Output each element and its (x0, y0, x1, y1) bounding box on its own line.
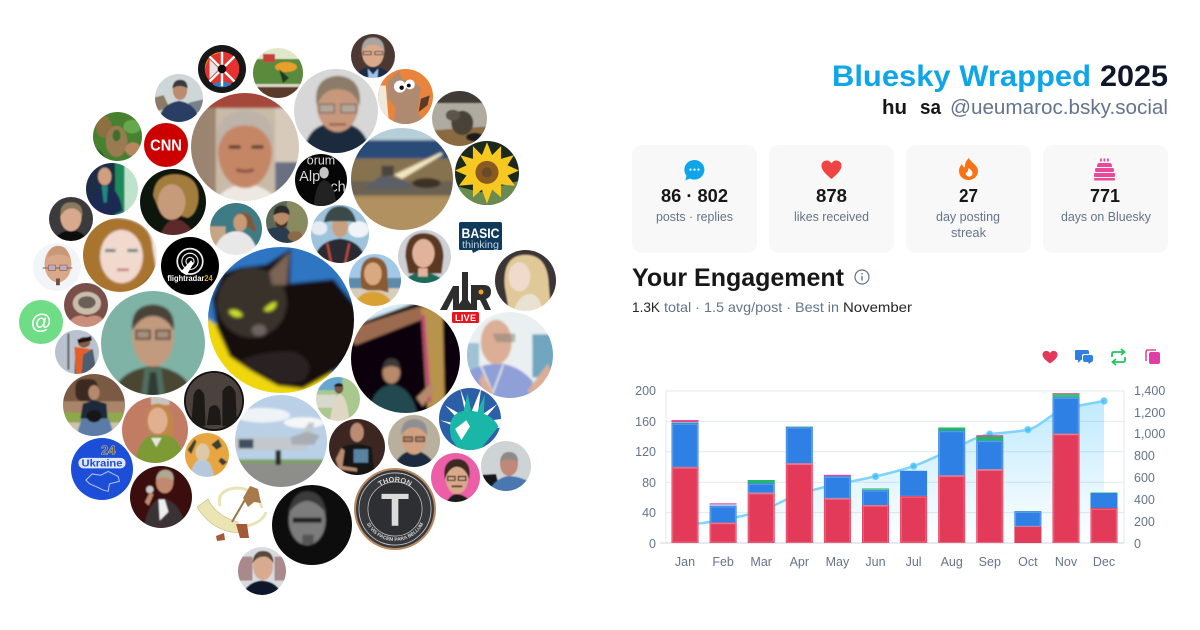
panel: likes received: 878 (816, 186, 847, 206)
panel: likes received (769, 145, 894, 253)
month labels: Nov (1055, 555, 1078, 569)
left axis labels: 0 (649, 537, 656, 551)
bar: Jun (862, 488, 889, 543)
avatar: man under market tent (351, 304, 460, 413)
right axis labels: 1,200 (1134, 406, 1165, 420)
engagement summary: November (843, 299, 912, 315)
logo: BASIC thinking: thinking (462, 240, 499, 251)
avatar: punk X logo (198, 45, 246, 93)
icon: birthday cake (1094, 158, 1115, 180)
right axis labels: 800 (1134, 449, 1155, 463)
bar: Apr (786, 426, 813, 543)
icon: legend likes (1042, 351, 1058, 364)
avatar: man in bookshelf room (238, 547, 286, 595)
month labels: Apr (790, 555, 809, 569)
avatar: woman with teal top (398, 230, 451, 283)
icon: legend replies (1075, 350, 1093, 364)
logo: AIR LIVE: LIVE (455, 313, 476, 323)
avatar: CNN logo (144, 123, 188, 167)
avatar: bald cartoon avatar (33, 243, 81, 291)
icon: horn and hobby horse (197, 486, 266, 541)
avatar: glasses man with grey hair (388, 415, 440, 467)
left axis labels: 40 (642, 506, 656, 520)
panel: day posting streak: day posting (936, 210, 1000, 224)
icon: legend quotes (1146, 350, 1160, 364)
right axis labels: 0 (1134, 537, 1141, 551)
stacked bars (672, 393, 1118, 543)
right axis labels (1134, 384, 1165, 551)
avatar: toucan sign (253, 48, 303, 98)
chart gridlines (660, 391, 1124, 543)
avatar: dark portrait man with book (329, 419, 385, 475)
avatar: woman at the beach (349, 254, 401, 306)
avatar: Forum Alpbach: Alp (299, 169, 320, 185)
icon: info (855, 270, 869, 284)
avatar: Ukraine 24 (71, 438, 133, 500)
left axis labels: 160 (635, 415, 656, 429)
avatar: landscape with rocket launcher (351, 128, 453, 230)
avatar: man with glasses on mint background (101, 291, 205, 395)
avatar: Forum Alpbach (295, 154, 347, 206)
panel: day posting streak (906, 145, 1031, 253)
avatar: man with glasses dark wall (351, 34, 395, 78)
month labels (675, 555, 1115, 569)
avatar: red-haired woman (83, 218, 157, 292)
avatar: older man portrait (191, 93, 299, 201)
avatar: woman in white on sofa (210, 203, 262, 255)
avatar: woman in green cardigan (122, 397, 188, 463)
left axis labels (635, 384, 656, 551)
cumulative line (685, 401, 1104, 525)
logo: BASIC thinking (459, 222, 502, 253)
avatar: man dark background (49, 197, 93, 241)
left axis labels: 120 (635, 445, 656, 459)
avatar: airplane on tarmac (235, 395, 327, 487)
avatar: seated person in greenery (316, 377, 360, 421)
right axis labels: 1,000 (1134, 427, 1165, 441)
panel: days on Bluesky: days on Bluesky (1061, 210, 1152, 224)
avatar: green @ placeholder (19, 300, 63, 344)
avatar: cartoon cat on orange (378, 69, 433, 124)
avatar: bearded man outdoors (266, 201, 308, 243)
panel: day posting streak: streak (951, 226, 987, 240)
panel: posts and replies: posts · replies (656, 210, 733, 224)
avatar: man on brick steps (63, 374, 125, 436)
title: Bluesky Wrapped (832, 60, 1091, 93)
avatar: Thoron coin: THORON (378, 476, 412, 486)
avatar: Ukraine 24: 24 (101, 443, 116, 458)
month labels: Aug (941, 555, 963, 569)
panel: days on Bluesky (1043, 145, 1168, 253)
avatar: speaker with microphone (130, 466, 192, 528)
avatar: Thoron coin: SI VIS PACEM PARA BELLUM (367, 522, 424, 541)
month labels: Feb (712, 555, 734, 569)
title: 2025 (1100, 60, 1168, 93)
right axis labels: 1,400 (1134, 384, 1165, 398)
month labels: Oct (1018, 555, 1038, 569)
left axis labels: 80 (642, 476, 656, 490)
avatar: man in helmet (311, 205, 369, 263)
month labels: Sep (979, 555, 1001, 569)
avatar: older man with hand on chin (481, 441, 531, 491)
icon: legend reposts (1112, 349, 1125, 365)
month labels: Jan (675, 555, 695, 569)
avatar: pink background man (431, 453, 480, 502)
heading: your engagement: Your Engagement (632, 264, 845, 292)
icon: heart (822, 160, 842, 179)
icon: flame (959, 158, 978, 180)
bar: Dec (1090, 492, 1118, 543)
logo: BASIC thinking: BASIC (462, 225, 500, 241)
panel: day posting streak: 27 (959, 186, 978, 206)
bar: Jan (672, 420, 698, 543)
panel: avatar bubble cluster (19, 34, 556, 595)
logo: AIR LIVE: AIR (480, 291, 482, 294)
bar: Jul (900, 471, 927, 543)
bar: May (824, 475, 851, 543)
avatar: birds and woman (185, 433, 229, 477)
panel: days on Bluesky: 771 (1090, 186, 1120, 206)
panel: posts and replies: 86 · 802 (661, 186, 728, 206)
chart: engagement by month (635, 384, 1165, 569)
avatar: blonde woman illustration (495, 250, 556, 311)
bar: Feb (710, 503, 737, 543)
avatar: Thoron coin: T (381, 484, 409, 536)
avatar: man in glasses and dark jacket (294, 69, 378, 153)
engagement summary: total · 1.5 avg/post · Best in (664, 299, 839, 315)
panel: likes received: likes received (794, 210, 869, 224)
bar: Mar (748, 480, 775, 543)
avatar: Forum Alpbach: orum (307, 153, 335, 167)
avatar: flightradar24 (161, 237, 219, 295)
icon: speech bubble (684, 160, 704, 180)
avatar: Tyrion portrait (140, 169, 206, 235)
logo: AIR LIVE (440, 272, 491, 323)
user handle: sa (920, 97, 942, 119)
month labels: Dec (1093, 555, 1115, 569)
avatar: grey cat on floor (432, 91, 487, 146)
month labels: Mar (750, 555, 772, 569)
bar: Sep (976, 435, 1003, 543)
avatar: black and white man (272, 485, 352, 565)
cumulative markers (872, 398, 1107, 480)
chart legend (1042, 349, 1160, 365)
avatar: flightradar24: flightradar24 (167, 274, 213, 283)
avatar: bald man with lanyard (467, 312, 553, 398)
bar: Aug (938, 428, 965, 543)
avatar: Statue of Liberty logo (439, 388, 501, 450)
left axis labels: 200 (635, 384, 656, 398)
avatar: man in hoodie (155, 74, 203, 122)
right axis labels: 400 (1134, 493, 1155, 507)
cumulative area (685, 401, 1104, 543)
panel: posts and replies (632, 145, 757, 253)
avatar: Forum Alpbach: ch (330, 179, 346, 195)
month labels: Jul (906, 555, 922, 569)
bar: Nov (1052, 393, 1080, 543)
avatar: Thoron coin (354, 468, 436, 550)
right axis labels: 200 (1134, 515, 1155, 529)
avatar: Ukraine 24: Ukraine (82, 459, 123, 470)
avatar: green mossy image (93, 112, 142, 161)
avatar: orange scarf illustration (55, 330, 99, 374)
avatar: suited man green wall (86, 163, 138, 215)
user handle: @ueumaroc.bsky.social (950, 97, 1168, 119)
avatar: green @ placeholder: @ (31, 311, 51, 334)
avatar: black cat (208, 247, 354, 393)
avatar: soldiers silhouette (184, 371, 244, 431)
user handle: hu (882, 97, 907, 119)
month labels: May (826, 555, 850, 569)
avatar: hedgehog (64, 283, 108, 327)
month labels: Jun (865, 555, 886, 569)
engagement summary (632, 299, 912, 315)
right axis labels: 600 (1134, 471, 1155, 485)
avatar: sunflower (455, 141, 519, 205)
bar: Oct (1014, 511, 1041, 543)
engagement summary: 1.3K (632, 299, 661, 315)
avatar: CNN logo: CNN (150, 137, 182, 154)
